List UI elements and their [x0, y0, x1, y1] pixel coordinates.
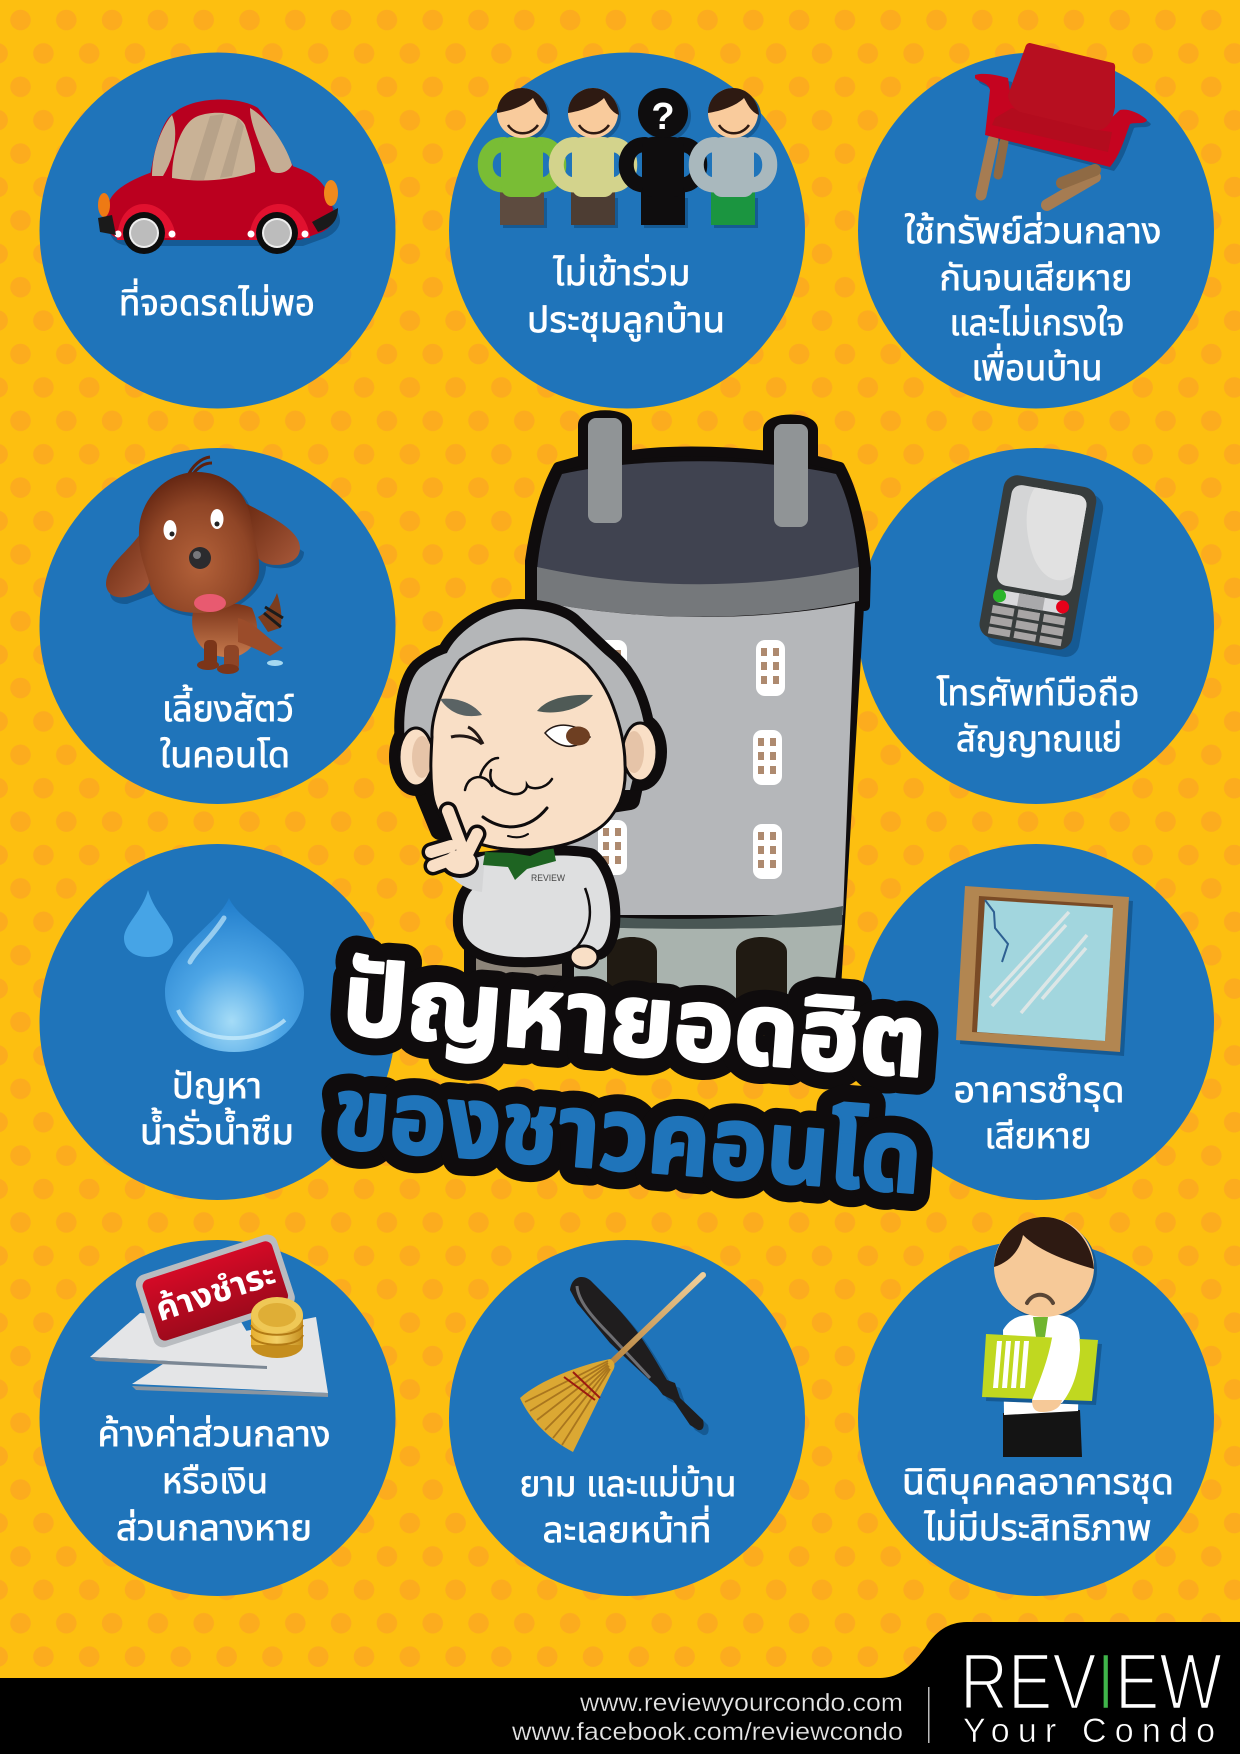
- wink eye: [451, 727, 483, 744]
- footer facebook url: www.facebook.com/reviewcondo: [511, 1718, 903, 1746]
- illustration: winking old man mascot: [399, 609, 657, 990]
- icon: overdue bill and coins: ค้างชำระ: [151, 1255, 280, 1329]
- label: signal line 1: โทรศัพท์มือถือ: [936, 672, 1140, 713]
- label: fees line 3: ส่วนกลางหาย: [116, 1507, 312, 1548]
- panel: water leaks: [40, 844, 396, 1200]
- person 3: unknown silhouette: [626, 88, 700, 228]
- label: signal line 2: สัญญาณแย่: [956, 718, 1122, 759]
- icon: small water drop: [124, 890, 173, 957]
- panel: damaging common property: [858, 43, 1214, 408]
- icon: baton and broom: [520, 1275, 709, 1452]
- icon: mobile phone: [976, 473, 1106, 659]
- footer bar: [0, 1622, 1240, 1754]
- label: leaks line 2: น้ำรั่วน้ำซึม: [140, 1107, 294, 1152]
- panel: negligent guards and maids: [449, 1240, 805, 1596]
- title line 2: ของชาวคอนโด: [329, 1056, 926, 1215]
- hair: [404, 609, 645, 790]
- person 3: unknown silhouette: ?: [651, 96, 675, 138]
- person 4: [696, 88, 770, 228]
- icon: residents: [485, 88, 770, 228]
- label: juristic line 2: ไม่มีประสิทธิภาพ: [924, 1507, 1152, 1548]
- title line 2: ของชาวคอนโด: [329, 1056, 926, 1215]
- label: parking: ที่จอดรถไม่พอ: [119, 278, 315, 323]
- label: property line 1: ใช้ทรัพย์ส่วนกลาง: [904, 210, 1162, 251]
- logo: REVIEW Your Condo: REVIEW: [960, 1637, 1222, 1726]
- windows: [598, 640, 785, 879]
- label: meetings line 2: ประชุมลูกบ้าน: [527, 299, 725, 341]
- footer website url: www.reviewyourcondo.com: [579, 1689, 903, 1717]
- label: meetings: ไม่เข้าร่วม: [552, 252, 690, 293]
- panel: pets in condo: [40, 448, 396, 804]
- sweater: [463, 855, 610, 957]
- illustration: condo building: [530, 415, 866, 1005]
- small hand at waist: [570, 946, 598, 968]
- icon: red car: [98, 99, 340, 254]
- icon: overdue bill and coins: [90, 1232, 328, 1397]
- collar: [483, 846, 556, 880]
- icon: large water drop: [165, 898, 304, 1052]
- label: staff line 1: ยาม และแม่บ้าน: [520, 1463, 736, 1504]
- pants: [470, 940, 568, 990]
- person 2: [556, 88, 630, 228]
- person 1: [485, 88, 559, 228]
- label: pets line 2: ในคอนโด: [160, 734, 290, 775]
- label: property line 4: เพื่อนบ้าน: [972, 343, 1102, 388]
- icon: broken red armchair: [975, 43, 1151, 205]
- open eye: [545, 725, 590, 746]
- panel: damaged building: [858, 844, 1214, 1200]
- title line 1: ปัญหายอดฮิต: [339, 943, 930, 1099]
- icon: cracked window: [956, 886, 1133, 1056]
- panel: unpaid fees: [40, 1232, 396, 1596]
- nose and smile: [465, 758, 552, 837]
- label: juristic line 1: นิติบุคคลอาคารชุด: [902, 1461, 1174, 1503]
- label: property line 3: และไม่เกรงใจ: [950, 302, 1124, 343]
- panel: skipping meetings: [449, 52, 805, 408]
- panel: poor mobile signal: [858, 448, 1214, 804]
- logo: REVIEW Your Condo: Your Condo: [963, 1712, 1215, 1750]
- label: leaks line 1: ปัญหา: [172, 1065, 262, 1106]
- label: property line 2: กันจนเสียหาย: [940, 257, 1132, 298]
- shirt logo: REVIEW: [531, 873, 565, 883]
- ears: [399, 723, 657, 786]
- panel: parking shortage: [40, 52, 396, 408]
- label: building line 1: อาคารชำรุด: [954, 1069, 1124, 1111]
- label: staff line 2: ละเลยหน้าที่: [542, 1505, 712, 1550]
- title line 1: ปัญหายอดฮิต: [339, 943, 930, 1099]
- label: fees line 2: หรือเงิน: [162, 1460, 268, 1501]
- black silhouette of mascot: [399, 609, 657, 957]
- label: building line 2: เสียหาย: [984, 1115, 1092, 1156]
- eyebrows: [440, 695, 593, 716]
- icon: sad manager with folder: [982, 1217, 1102, 1457]
- icon: brown dog: [106, 457, 304, 674]
- face: [431, 639, 625, 850]
- label: fees line 1: ค้างค่าส่วนกลาง: [98, 1413, 330, 1454]
- peace-sign hand: [431, 811, 479, 878]
- panel: ineffective juristic person: [858, 1217, 1214, 1596]
- label: pets line 1: เลี้ยงสัตว์: [162, 684, 294, 729]
